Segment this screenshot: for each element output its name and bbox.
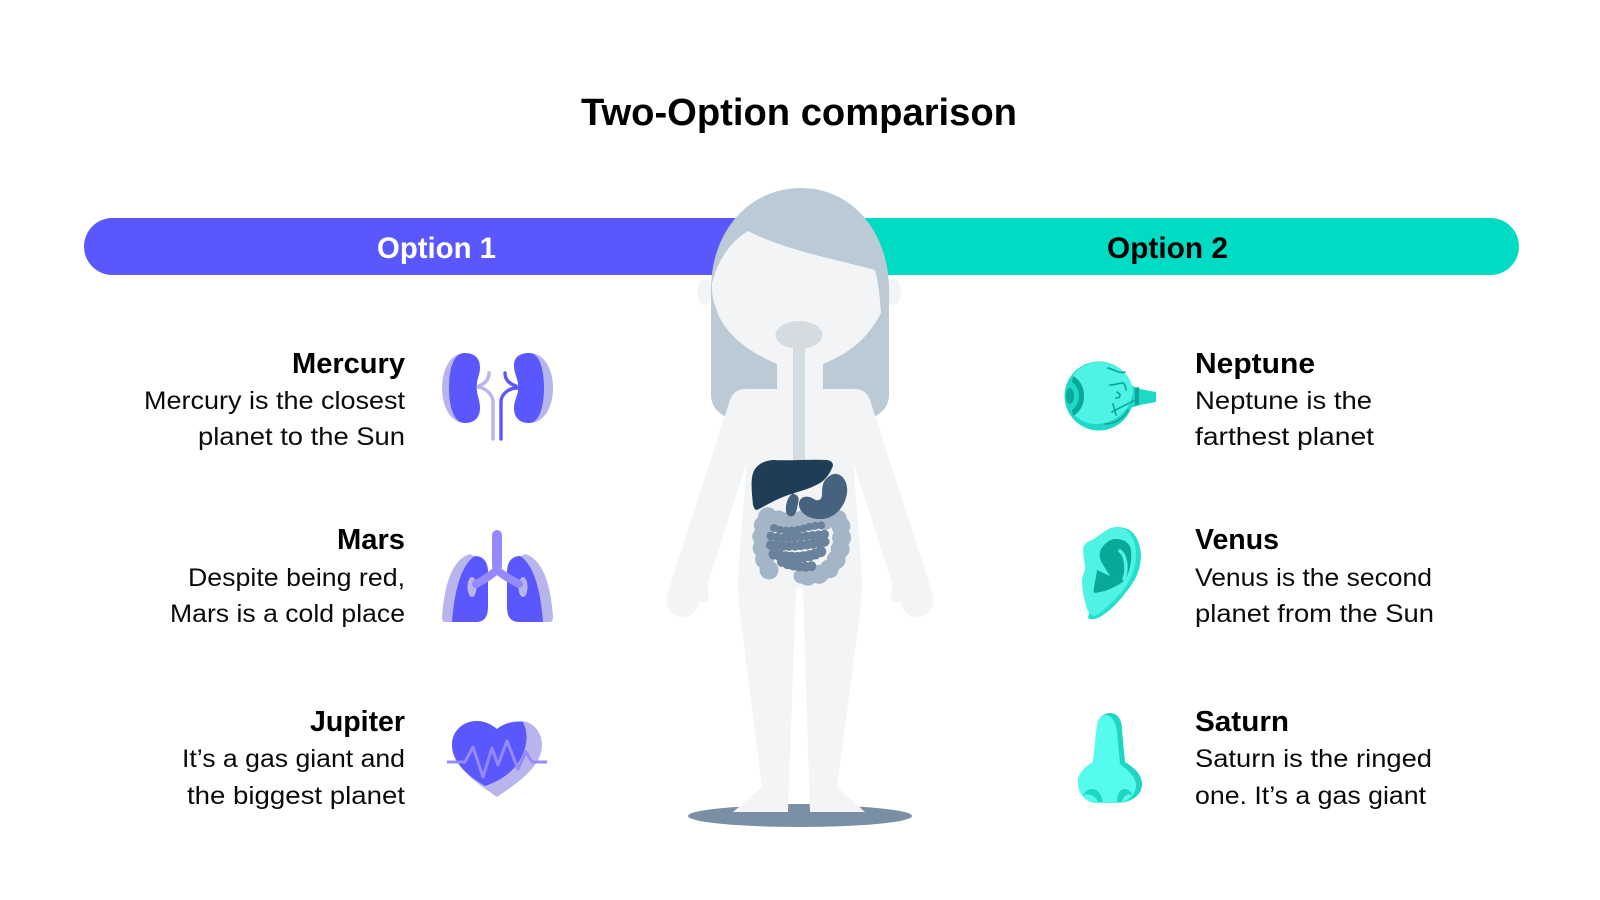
text: Venus: planet from the Sun — [1195, 600, 1434, 628]
text: Venus: Venus is the second — [1195, 564, 1432, 592]
ears — [697, 279, 901, 305]
text: Neptune: Neptune — [1195, 348, 1315, 380]
text: Mars: Despite being red, — [188, 564, 405, 592]
icon: kidneys — [442, 353, 553, 439]
ground shadow — [688, 804, 912, 827]
text: Saturn: Saturn — [1195, 706, 1289, 738]
icon: heart — [447, 721, 547, 797]
title: Two-Option comparison — [581, 92, 1017, 134]
text: Mars: Mars is a cold place — [170, 600, 405, 628]
text: Jupiter — [182, 706, 405, 810]
text: Mars — [170, 524, 405, 628]
text: Mercury: Mercury is the closest — [144, 387, 405, 415]
icon: eye — [1064, 362, 1156, 430]
text: Jupiter: It’s a gas giant and — [182, 745, 405, 773]
text: Saturn: Saturn is the ringed — [1195, 745, 1432, 773]
icon: lungs — [442, 535, 553, 622]
stomach — [787, 474, 847, 519]
text: Venus: Venus — [1195, 524, 1279, 556]
large intestine — [762, 516, 842, 576]
icon: ear — [1082, 527, 1141, 619]
option 1 bar — [84, 218, 804, 275]
text: Mercury — [144, 348, 405, 451]
text: Jupiter: Jupiter — [310, 706, 405, 738]
hair — [711, 188, 889, 418]
liver — [752, 460, 833, 510]
human body figure — [666, 188, 934, 827]
text: Jupiter: the biggest planet — [187, 782, 405, 810]
throat and esophagus — [776, 321, 822, 465]
text: Mercury: Mercury — [292, 348, 405, 380]
text: Neptune: Neptune is the — [1195, 387, 1372, 415]
text: Venus — [1195, 524, 1434, 628]
text: Saturn — [1195, 706, 1432, 810]
text: Saturn: one. It’s a gas giant — [1195, 782, 1426, 810]
body — [666, 350, 934, 812]
option 1 bar: Option 1 — [377, 232, 496, 265]
face — [712, 231, 881, 364]
text: Mars: Mars — [337, 524, 405, 556]
option 2 bar: Option 2 — [1107, 232, 1228, 265]
small intestine — [771, 525, 830, 567]
text: Mercury: planet to the Sun — [198, 423, 405, 451]
icon: nose — [1078, 713, 1142, 803]
text: Neptune: farthest planet — [1195, 423, 1374, 451]
option 2 bar — [800, 218, 1519, 275]
text: Neptune — [1195, 348, 1374, 451]
